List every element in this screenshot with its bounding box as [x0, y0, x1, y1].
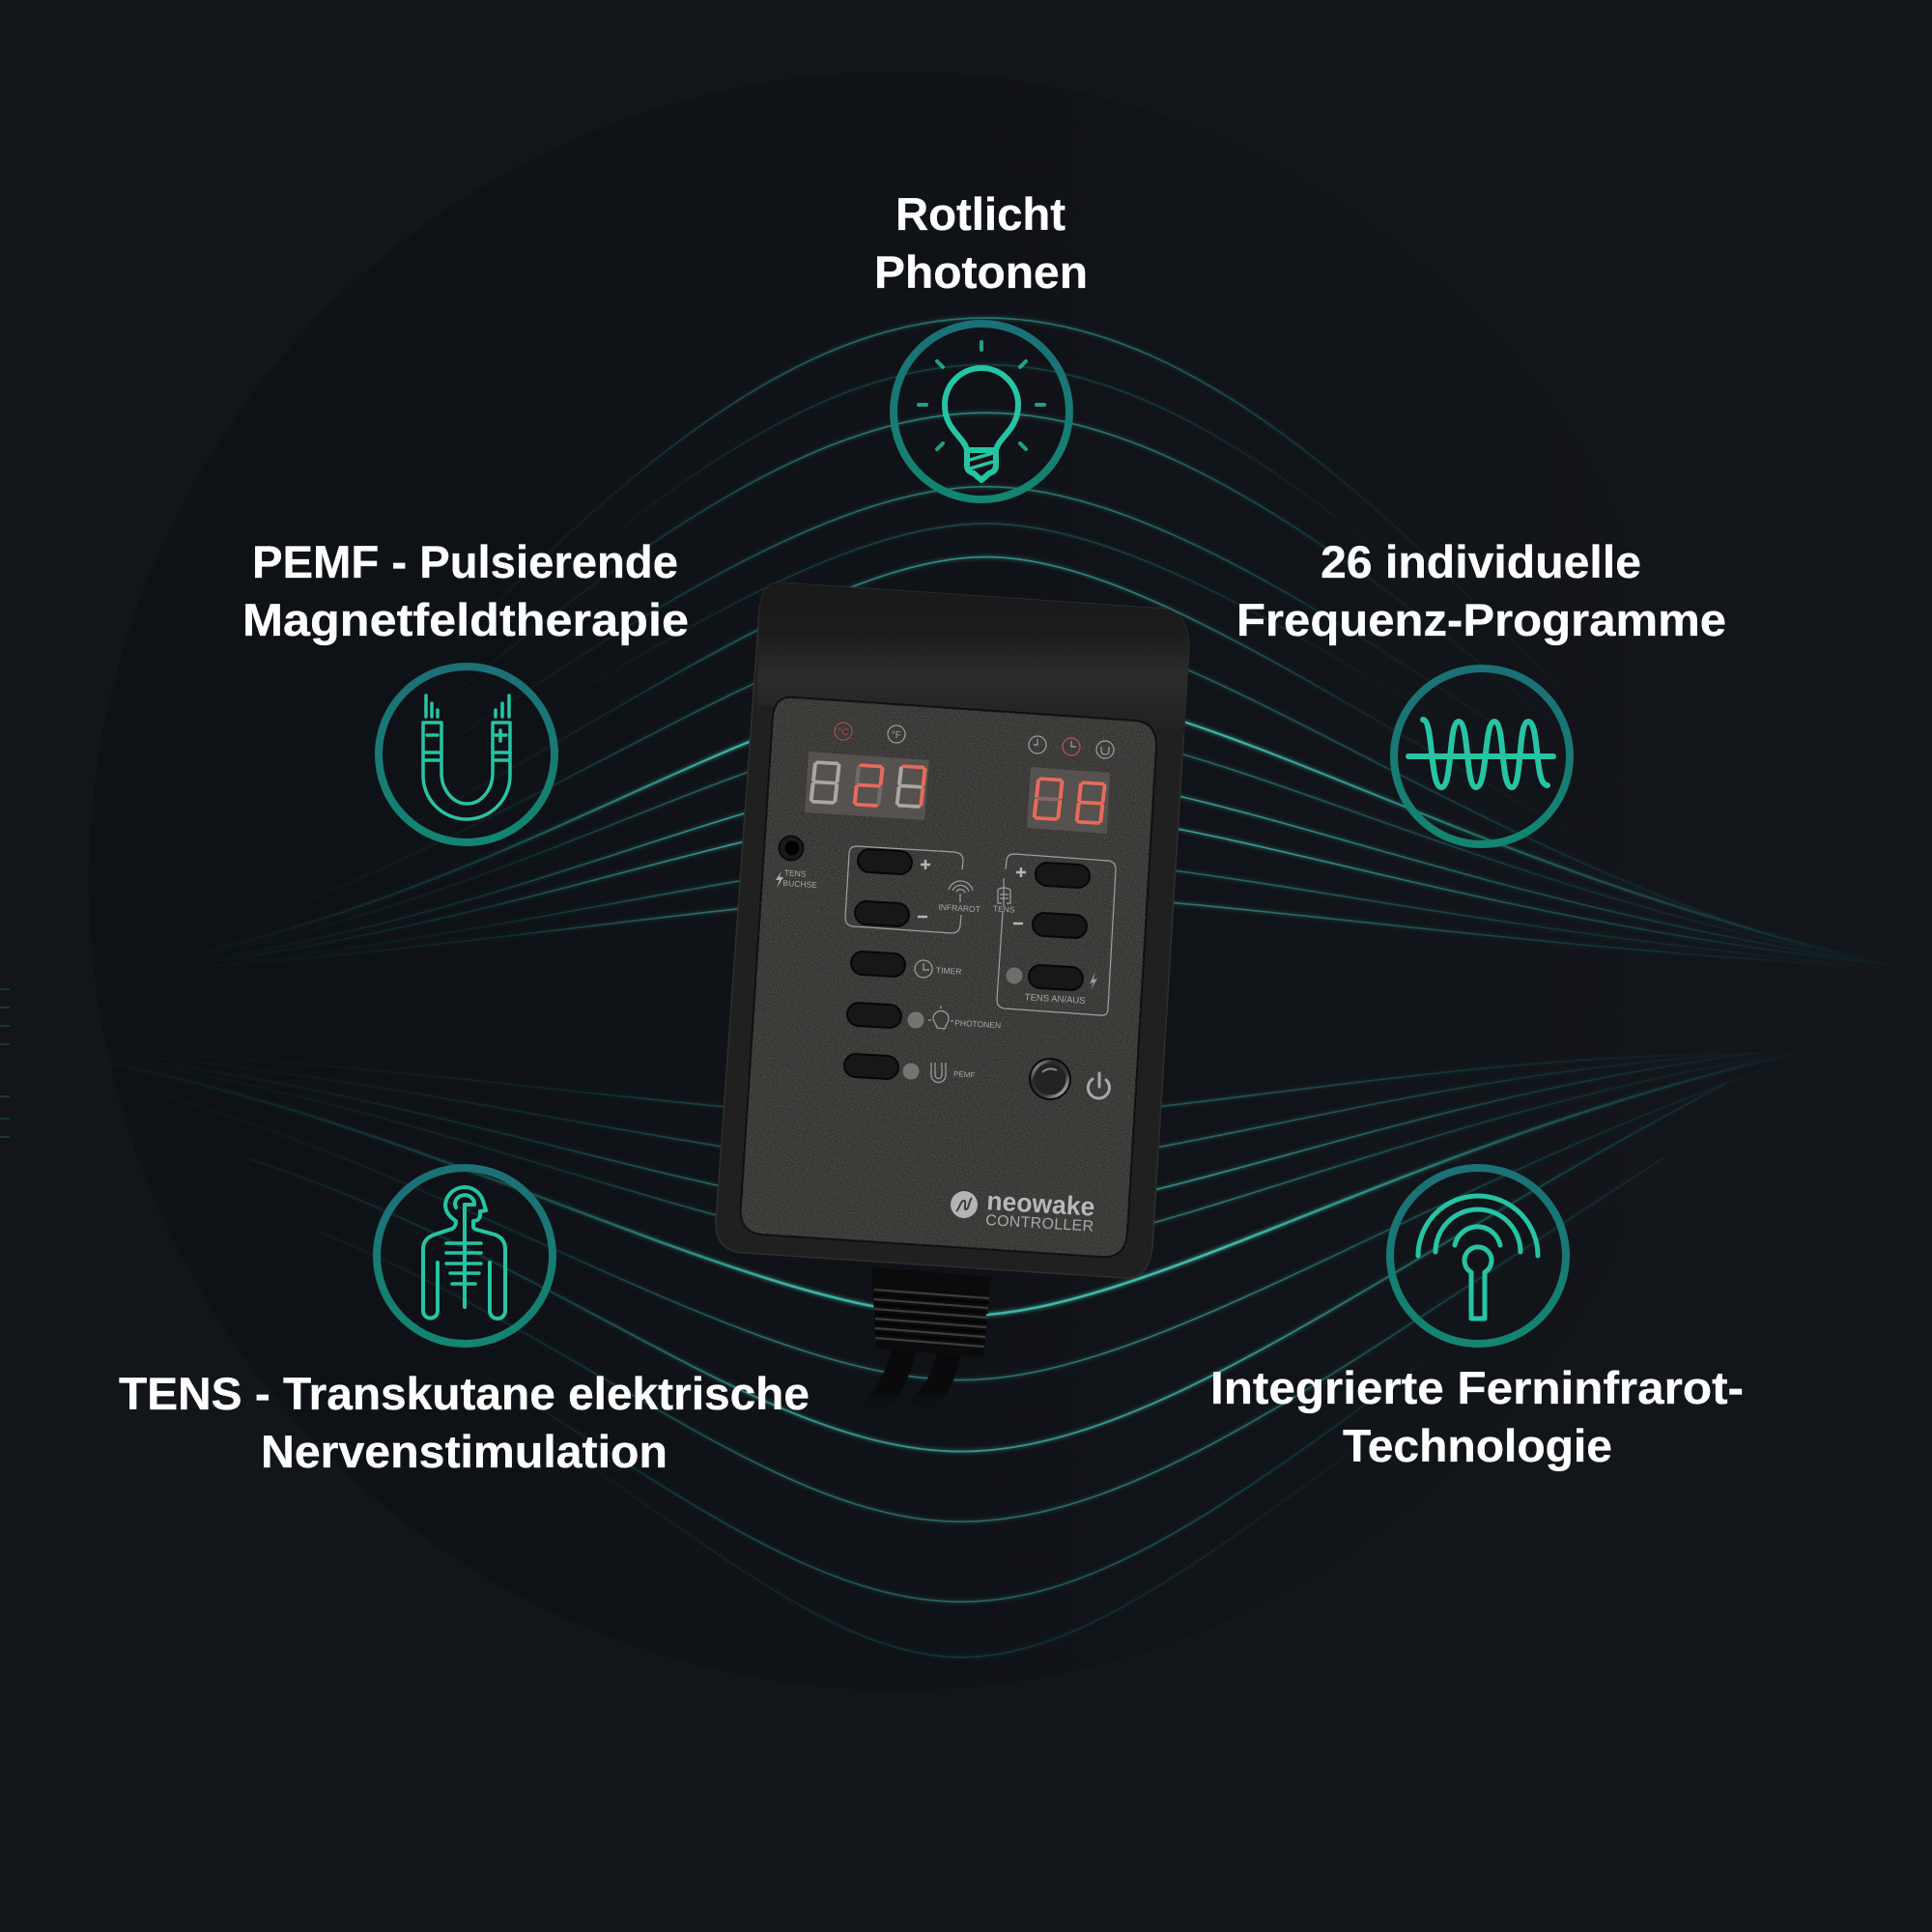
feature: PEMF	[242, 536, 689, 842]
PEMF row: PEMF	[953, 1069, 976, 1080]
feature: Ferninfrarot	[1210, 1168, 1744, 1471]
power button	[1029, 1058, 1109, 1100]
cables	[872, 1348, 950, 1412]
feature: Frequenz-Programme	[1236, 536, 1726, 844]
icon ring	[1394, 668, 1570, 844]
wave lines: lower family	[0, 1047, 1824, 1521]
heading: Nervenstimulation	[261, 1426, 668, 1477]
heading: Magnetfeldtherapie	[242, 594, 689, 645]
heading: PEMF - Pulsierende	[252, 536, 678, 587]
photon row	[846, 1002, 1001, 1030]
icon: magnet	[423, 696, 510, 819]
timer row: TIMER	[936, 965, 962, 977]
wave lines: upper family	[160, 616, 1910, 971]
feature: Rotlicht Photonen	[874, 188, 1088, 499]
feature: TENS	[119, 1168, 810, 1477]
heading: TENS - Transkutane elektrische	[119, 1368, 810, 1419]
infrared control group: INFRAROT	[938, 902, 980, 914]
heading	[1236, 536, 1726, 645]
right display	[1027, 767, 1110, 834]
icon ring	[1390, 1168, 1566, 1344]
heading: Integrierte Ferninfrarot-	[1210, 1362, 1744, 1413]
icon: light bulb	[919, 342, 1044, 480]
heading: Technologie	[1343, 1420, 1612, 1471]
cable connector	[871, 1267, 992, 1357]
TENS socket: BUCHSE	[782, 878, 817, 890]
icon ring	[894, 324, 1069, 499]
photon row: PHOTONEN	[954, 1018, 1001, 1030]
panel grain	[741, 697, 1156, 1257]
heading	[874, 188, 1088, 298]
icon ring	[377, 1168, 553, 1344]
infrared control group	[845, 846, 980, 933]
timer row	[850, 951, 962, 978]
icon ring	[379, 667, 554, 842]
wave lines: upper arcs around the bulb	[185, 318, 1786, 936]
icon: nervous system	[423, 1187, 505, 1319]
PEMF row	[843, 1053, 976, 1083]
device body	[716, 582, 1189, 1278]
heading	[242, 536, 689, 645]
heading: Rotlicht	[895, 188, 1065, 240]
icon: infrared antenna	[1418, 1196, 1538, 1319]
heading	[1210, 1362, 1744, 1471]
neowake logo: neowake	[986, 1186, 1095, 1222]
left edge ticks	[0, 989, 10, 1137]
left display	[805, 752, 929, 820]
heading: Frequenz-Programme	[1236, 594, 1726, 645]
heading: 26 individuelle	[1321, 536, 1641, 587]
TENS control group: TENS	[993, 903, 1015, 915]
icon: frequency wave	[1408, 720, 1553, 787]
TENS control group: TENS AN/AUS	[1024, 992, 1086, 1007]
TENS control group	[993, 854, 1116, 1015]
controller device	[716, 582, 1189, 1412]
neowake logo	[951, 1186, 1095, 1236]
TENS socket	[776, 837, 817, 890]
heading	[119, 1368, 810, 1477]
neowake logo: CONTROLLER	[985, 1212, 1094, 1236]
unit indicators: °C	[838, 727, 849, 738]
control panel	[741, 697, 1156, 1257]
heading: Photonen	[874, 246, 1088, 298]
wave lines: lower outer arcs	[370, 1233, 1602, 1658]
unit indicators	[835, 723, 1114, 758]
TENS socket: TENS	[784, 867, 807, 879]
unit indicators: °F	[892, 730, 901, 741]
device top cap	[757, 582, 1189, 734]
